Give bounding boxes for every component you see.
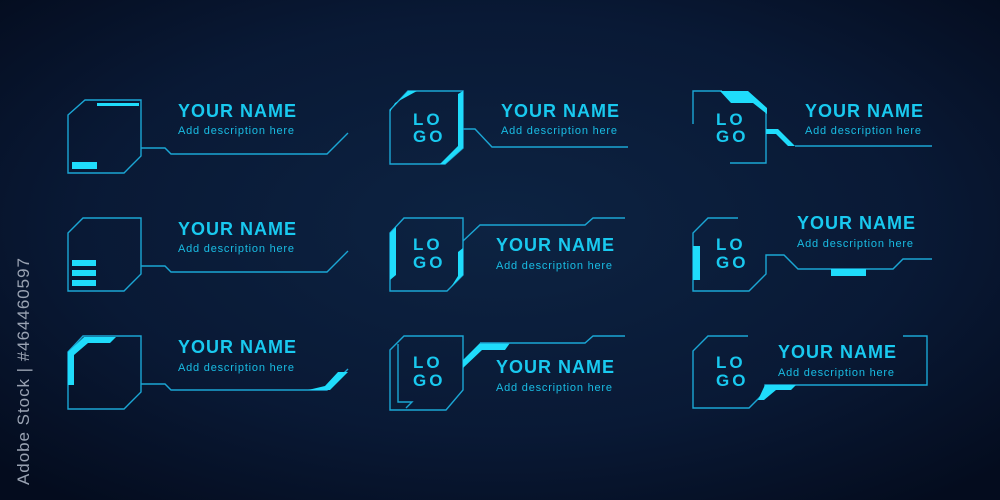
panel: col1 row1 xyxy=(68,100,348,173)
panel: col3 row1 xyxy=(693,91,932,163)
panel: col3 row2: LO xyxy=(716,235,746,254)
panel: col3 row1: Add description here xyxy=(805,125,921,137)
panel: col3 row2: YOUR NAME xyxy=(797,213,915,233)
panel: col2 row3: YOUR NAME xyxy=(496,357,614,377)
panel: col3 row2 xyxy=(693,213,932,291)
panel: col2 row2: LO xyxy=(413,235,443,254)
panel: col2 row1: GO xyxy=(413,127,445,146)
panel: col1 row3: YOUR NAME xyxy=(178,337,296,357)
panel: col2 row1: LO xyxy=(413,110,443,129)
panel: col2 row3 xyxy=(390,336,625,410)
panel: col3 row3: LO xyxy=(716,353,746,372)
panel: col1 row2: Add description here xyxy=(178,243,294,255)
side label: stock id: Adobe Stock | #464460597 xyxy=(14,258,33,485)
panel: col3 row3: GO xyxy=(716,371,748,390)
panel: col2 row3: GO xyxy=(413,371,445,390)
panel: col3 row2: GO xyxy=(716,253,748,272)
panel: col3 row3: Add description here xyxy=(778,367,894,379)
panel: col1 row3 xyxy=(68,336,348,409)
panel: col2 row3: LO xyxy=(413,353,443,372)
panel: col2 row3: Add description here xyxy=(496,382,612,394)
panel: col1 row2: YOUR NAME xyxy=(178,219,296,239)
panel: col2 row2 xyxy=(390,218,625,291)
panel: col3 row1: GO xyxy=(716,127,748,146)
panel: col1 row2 xyxy=(68,218,348,291)
panel: col2 row2: Add description here xyxy=(496,260,612,272)
panel: col1 row3: Add description here xyxy=(178,362,294,374)
panel: col1 row1: YOUR NAME xyxy=(178,101,296,121)
panel: col3 row3 xyxy=(693,336,927,408)
panel: col2 row2: GO xyxy=(413,253,445,272)
panel: col2 row1: YOUR NAME xyxy=(501,101,619,121)
panel: col2 row2: YOUR NAME xyxy=(496,235,614,255)
panel: col3 row2: Add description here xyxy=(797,238,913,250)
panel: col3 row1: LO xyxy=(716,110,746,129)
panel: col3 row3: YOUR NAME xyxy=(778,342,896,362)
panel: col1 row1: Add description here xyxy=(178,125,294,137)
panel: col2 row1: Add description here xyxy=(501,125,617,137)
panel: col2 row1 xyxy=(390,91,628,164)
panel: col3 row1: YOUR NAME xyxy=(805,101,923,121)
